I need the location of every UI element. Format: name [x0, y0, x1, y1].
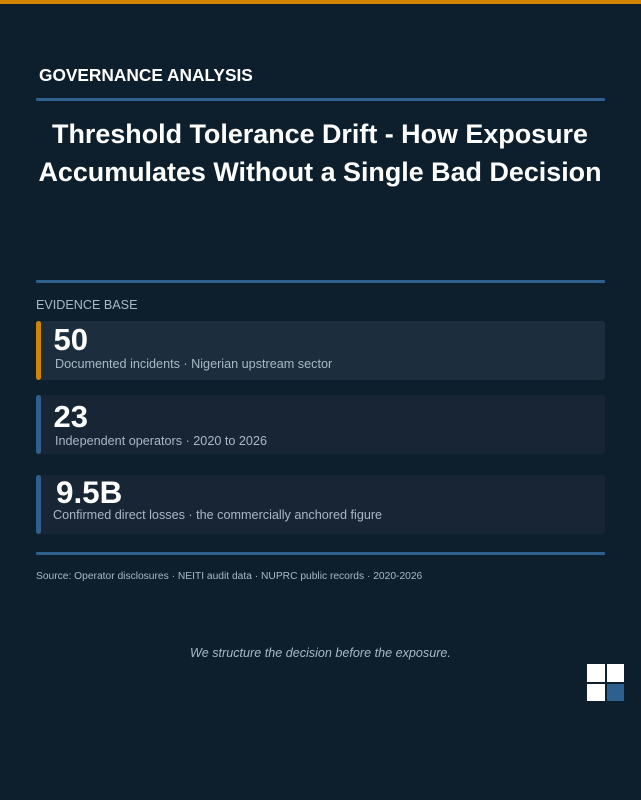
- label: losses: Confirmed direct losses · the commercially anchored figure: [53, 508, 382, 522]
- card: losses: [36, 475, 604, 534]
- label: operators: Independent operators · 2020 to 2026: [55, 434, 267, 448]
- evidence heading: EVIDENCE BASE: [36, 298, 137, 312]
- card: operators: [36, 395, 604, 454]
- accent: blue: [36, 475, 41, 534]
- source note: Source: Operator disclosures · NEITI audit data · NUPRC public records · 2020-2026: [36, 571, 422, 582]
- top accent bar: [0, 0, 641, 4]
- accent: blue: [36, 395, 41, 454]
- stat: 50: 50: [54, 322, 88, 357]
- stat: 23: 23: [54, 399, 88, 434]
- section label: GOVERNANCE ANALYSIS: [39, 65, 253, 85]
- logo: [587, 664, 624, 701]
- title: [38, 119, 602, 186]
- title: Accumulates Without a Single Bad Decision: [38, 156, 602, 186]
- tagline: We structure the decision before the exposure.: [190, 646, 451, 660]
- card: incidents: [36, 321, 604, 380]
- label: incidents: Documented incidents · Nigerian upstream sector: [55, 357, 332, 371]
- title: Threshold Tolerance Drift - How Exposure: [52, 119, 588, 149]
- stat: 9.5B: 9.5B: [56, 475, 122, 510]
- accent: amber: [36, 321, 41, 380]
